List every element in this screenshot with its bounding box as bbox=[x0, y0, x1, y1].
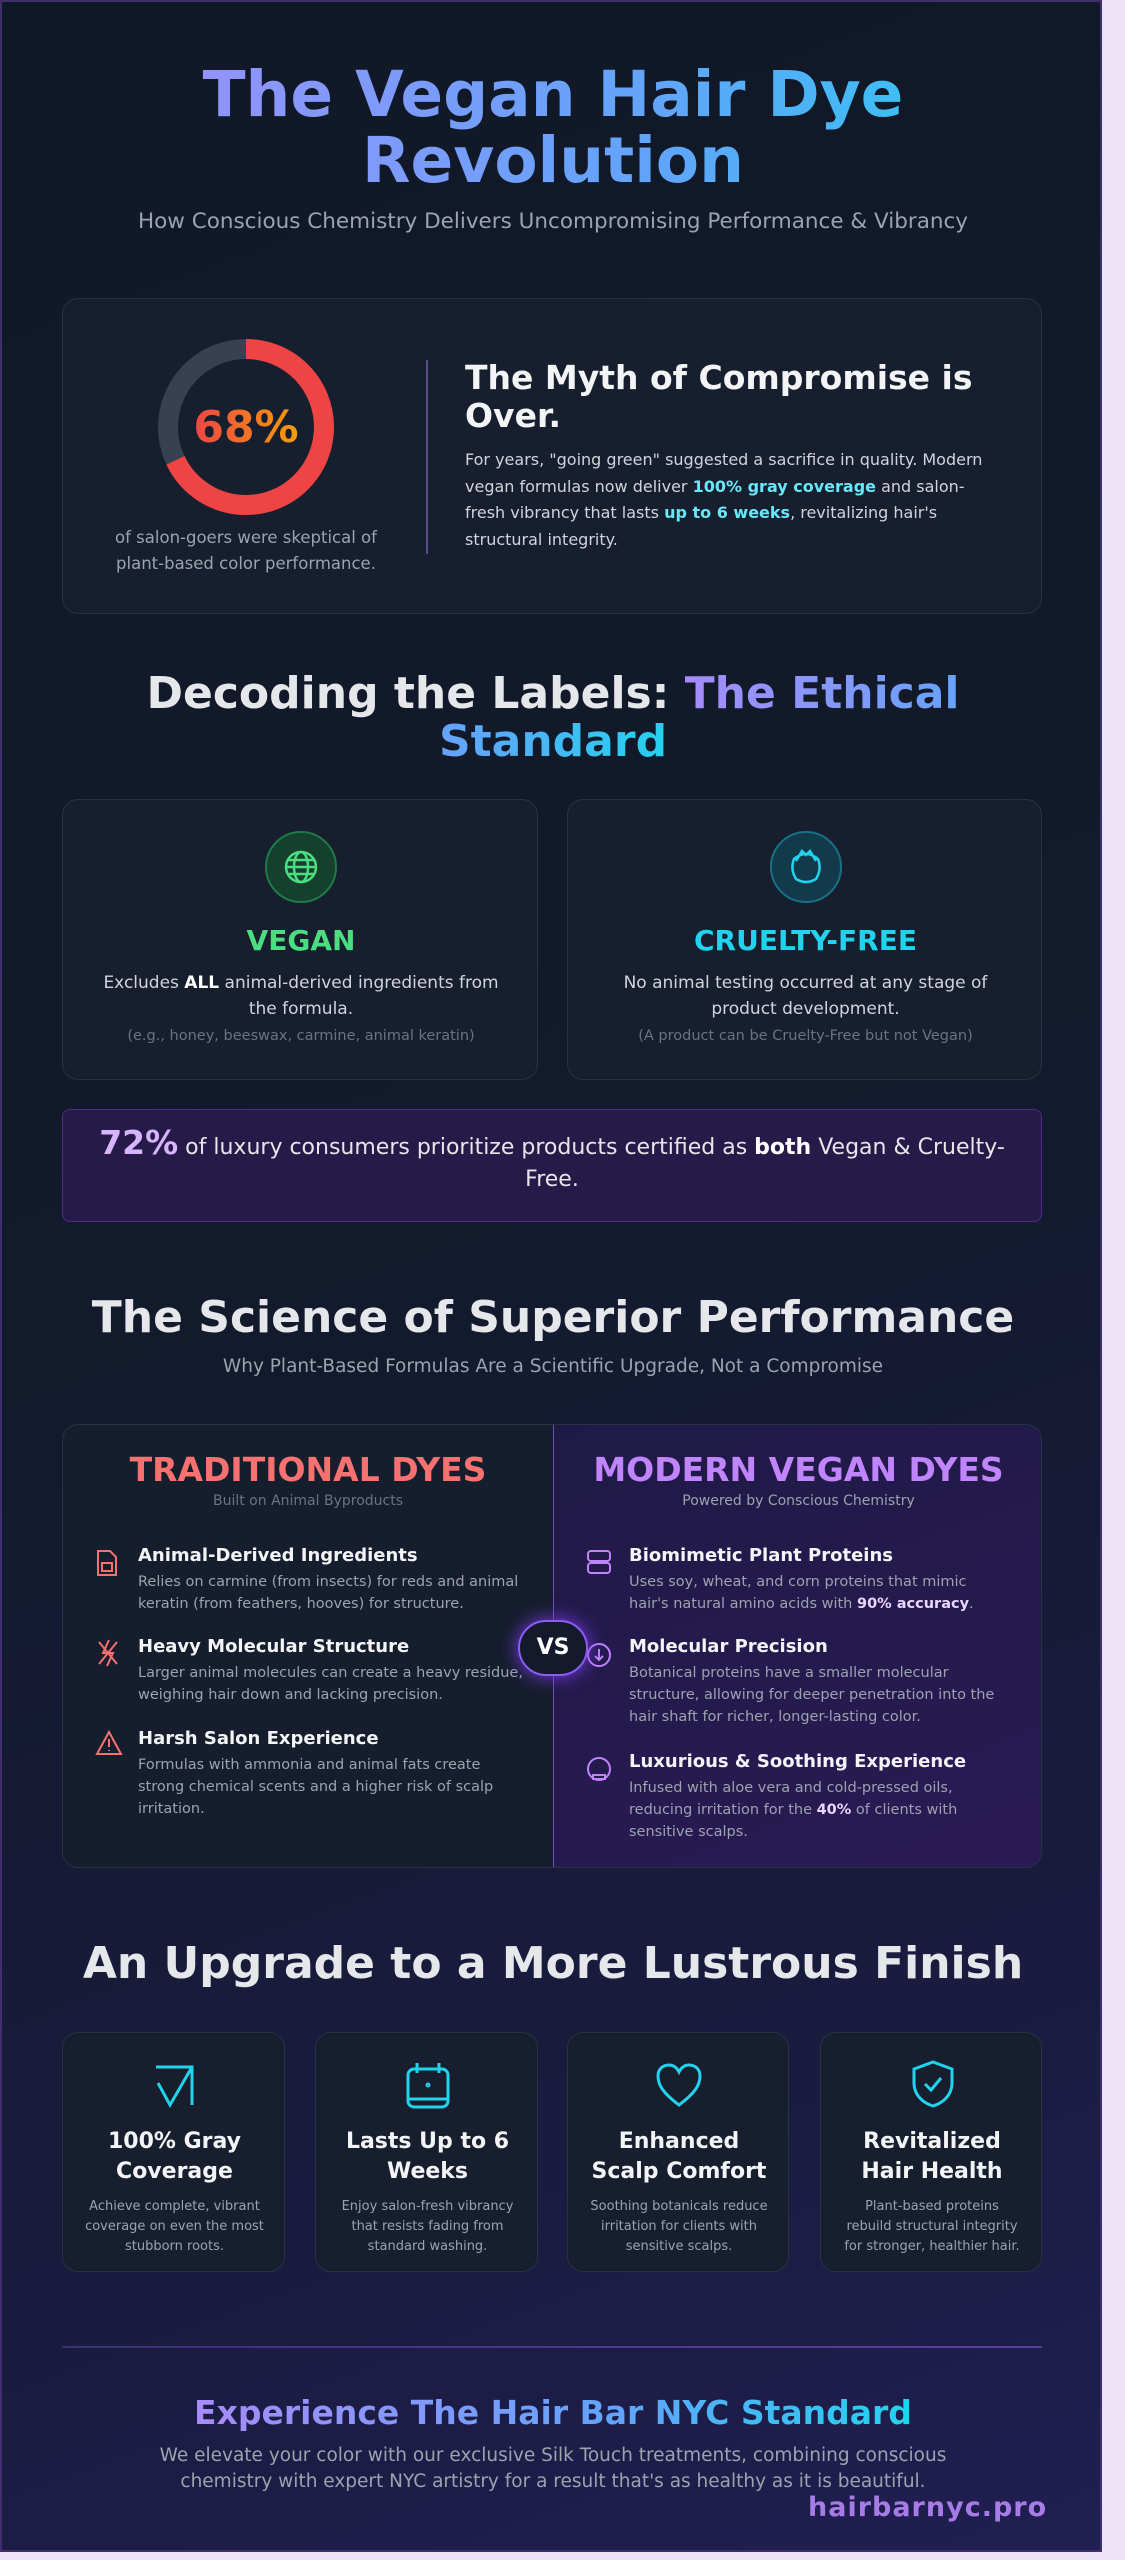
feature card: hair health: Hair Health bbox=[861, 2159, 1003, 2184]
icon: calendar bbox=[406, 2063, 450, 2108]
heading: decoding the labels: Standard bbox=[439, 716, 667, 767]
VS badge bbox=[518, 1620, 588, 1676]
column: modern vegan: Powered by Conscious Chemistry bbox=[682, 1493, 915, 1509]
note: (A product can be Cruelty-Free but not Vegan) bbox=[638, 1028, 973, 1044]
paragraph: For years, "going green" suggested a sacrifice in quality. Modern vegan formulas now deliver 100% gray coverage and salon-fresh vibrancy that lasts up to 6 weeks, revitalizing hair's structural integrity. bbox=[465, 450, 982, 548]
feature card: gray coverage: Coverage bbox=[116, 2159, 233, 2184]
feature card: hair health: Revitalized bbox=[863, 2129, 1001, 2154]
column: traditional: Formulas with ammonia and animal fats create strong chemical scents and a higher risk of scalp irritation. bbox=[138, 1757, 493, 1817]
feature card: hair health: rebuild structural integrity for stronger, healthier hair. bbox=[844, 2219, 1020, 2254]
feature card: 6 weeks: Weeks bbox=[387, 2159, 468, 2184]
item: harsh experience bbox=[95, 1728, 493, 1817]
heading traditional: TRADITIONAL DYES bbox=[130, 1450, 486, 1489]
subheading: Why Plant-Based Formulas Are a Scientific Upgrade, Not a Compromise bbox=[223, 1356, 883, 1377]
heading: decoding the labels: Decoding the Labels: The Ethical bbox=[146, 668, 960, 719]
item: biomimetic bbox=[587, 1545, 974, 1612]
column: traditional: Larger animal molecules can create a heavy residue, weighing hair down and lacking precision. bbox=[138, 1665, 523, 1703]
column: traditional: Animal-Derived Ingredients bbox=[138, 1545, 418, 1566]
feature card: hair health bbox=[820, 2032, 1042, 2272]
feature card: gray coverage: Achieve complete, vibrant coverage on even the most stubborn roots. bbox=[85, 2199, 264, 2254]
feature card: scalp comfort: Soothing botanicals reduce irritation for clients with sensitive scalps. bbox=[590, 2199, 768, 2254]
icon: heart bbox=[656, 2064, 702, 2107]
footer heading: Experience The Hair Bar NYC Standard bbox=[194, 2393, 912, 2432]
column: modern vegan: Biomimetic Plant Proteins bbox=[629, 1545, 893, 1566]
icon: arrow bbox=[156, 2066, 194, 2108]
feature card: hair health: Plant-based proteins bbox=[865, 2199, 999, 2214]
donut chart 68% bbox=[158, 339, 334, 515]
callout: 72% stat: 72% of luxury consumers prioritize products certified as both Vegan & Cruelty-Free. bbox=[99, 1123, 1005, 1192]
heading: science: The Science of Superior Performance bbox=[92, 1292, 1014, 1343]
feature card: scalp comfort: Enhanced bbox=[619, 2129, 739, 2154]
footer text: We elevate your color with our exclusive Silk Touch treatments, combining conscious chemistry with expert NYC artistry for a result that's as healthy as it is beautiful. bbox=[160, 2445, 946, 2492]
label VEGAN: VEGAN bbox=[247, 924, 355, 957]
column: modern vegan: Botanical proteins have a smaller molecular structure, allowing for deeper penetration into the hair shaft for richer, longer-lasting color. bbox=[629, 1665, 994, 1725]
column: modern vegan: Luxurious & Soothing Experience bbox=[629, 1751, 966, 1772]
panel: vegan bbox=[62, 799, 538, 1080]
column: traditional bbox=[95, 1450, 523, 1817]
label CRUELTY-FREE: CRUELTY-FREE bbox=[694, 924, 917, 957]
column: traditional: Built on Animal Byproducts bbox=[213, 1493, 403, 1509]
callout: 72% stat bbox=[62, 1109, 1042, 1222]
donut chart 68%: 68% bbox=[193, 402, 299, 453]
subtitle: How Conscious Chemistry Delivers Uncompromising Performance & Vibrancy bbox=[138, 209, 968, 234]
description: No animal testing occurred at any stage of product development. bbox=[624, 973, 987, 1019]
panel: myth of compromise bbox=[62, 298, 1042, 614]
column: modern vegan: Infused with aloe vera and cold-pressed oils, reducing irritation for the 40% of clients with sensitive scalps. bbox=[629, 1780, 957, 1840]
VS badge: VS bbox=[537, 1635, 569, 1660]
column: traditional: Relies on carmine (from insects) for reds and animal keratin (from feathers, hooves) for structure. bbox=[138, 1574, 518, 1612]
item: soothing bbox=[587, 1751, 966, 1840]
feature card: 6 weeks: Lasts Up to 6 bbox=[346, 2129, 509, 2154]
panel: cruelty-free bbox=[567, 799, 1042, 1080]
feature card: gray coverage bbox=[62, 2032, 285, 2272]
heading: The Myth of Compromise is Over. bbox=[465, 358, 973, 435]
feature card: scalp comfort bbox=[567, 2032, 789, 2272]
column: modern vegan: Uses soy, wheat, and corn proteins that mimic hair's natural amino acids with 90% accuracy. bbox=[629, 1574, 974, 1612]
column: modern vegan: Molecular Precision bbox=[629, 1636, 828, 1657]
example note: (e.g., honey, beeswax, carmine, animal keratin) bbox=[127, 1028, 475, 1044]
heading modern: MODERN VEGAN DYES bbox=[593, 1450, 1004, 1489]
feature card: gray coverage: 100% Gray bbox=[108, 2129, 241, 2154]
item: precision bbox=[587, 1636, 994, 1725]
feature card: scalp comfort: Scalp Comfort bbox=[592, 2159, 766, 2184]
item: animal ingredients bbox=[97, 1545, 518, 1612]
icon: rabbit head bbox=[770, 831, 842, 903]
title: Revolution bbox=[362, 124, 744, 197]
title: The Vegan Hair Dye bbox=[203, 58, 903, 131]
panel: comparison bbox=[62, 1424, 1042, 1868]
donut caption: of salon-goers were skeptical of plant-based color performance. bbox=[115, 528, 377, 573]
title bbox=[2, 62, 1104, 194]
column: traditional: Harsh Salon Experience bbox=[138, 1728, 379, 1749]
icon: globe bbox=[265, 831, 337, 903]
icon: shield bbox=[912, 2060, 954, 2108]
feature card: 6 weeks bbox=[315, 2032, 538, 2272]
column: modern vegan bbox=[587, 1450, 1004, 1840]
column: traditional: Heavy Molecular Structure bbox=[138, 1636, 409, 1657]
heading: upgrade: An Upgrade to a More Lustrous Finish bbox=[83, 1938, 1023, 1989]
item: heavy molecules bbox=[98, 1636, 523, 1703]
feature card: 6 weeks: Enjoy salon-fresh vibrancy that resists fading from standard washing. bbox=[342, 2199, 513, 2254]
website url: hairbarnyc.pro bbox=[808, 2492, 1047, 2523]
heading: decoding the labels bbox=[146, 668, 960, 767]
description: Excludes ALL animal-derived ingredients from the formula. bbox=[103, 973, 499, 1019]
